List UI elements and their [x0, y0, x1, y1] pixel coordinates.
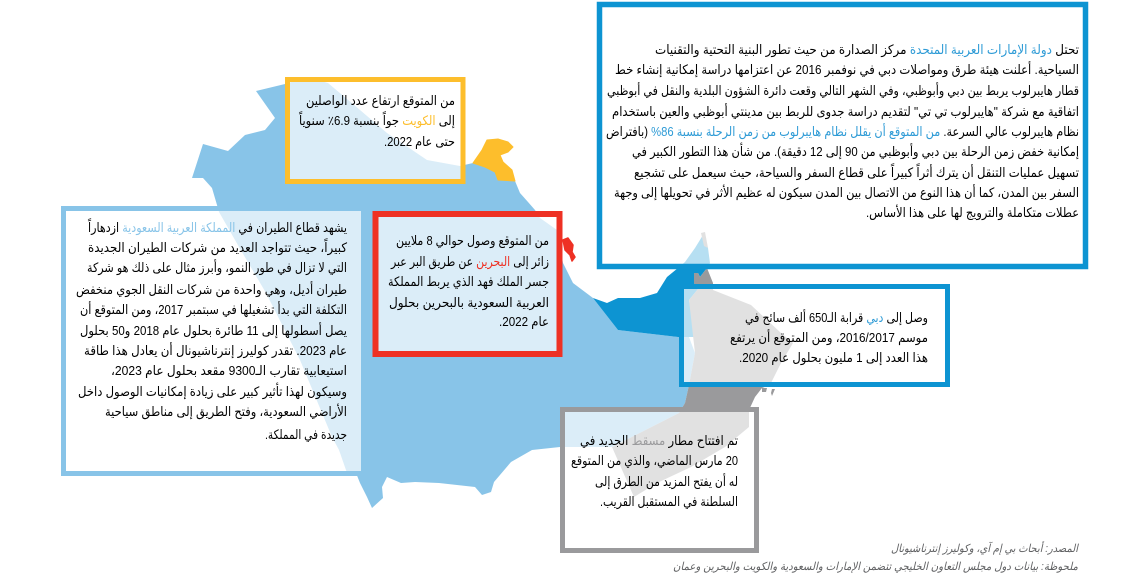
text block: استيعابية تقارب الـ9300 مقعد بحلول عام 2023، [111, 363, 347, 379]
panel: Oman [562, 410, 756, 550]
text block: زائر إلى البحرين عن طريق البر عبر [390, 254, 549, 270]
panel: United Arab Emirates [600, 4, 1086, 266]
map: Oman Musandam tip [701, 232, 708, 248]
text block: يشهد قطاع الطيران في المملكة العربية السعودية ازدهاراً [88, 218, 347, 236]
panel frame [288, 80, 463, 182]
map: United Arab Emirates [593, 235, 710, 337]
map: Oman [612, 268, 793, 497]
source line: المصدر: أبحاث بي إم آي، وكوليرز إنترناشيونال [891, 541, 1080, 555]
text block: يصل أسطولها إلى 11 طائرة بحلول عام 2018 و50 بحلول [80, 322, 347, 339]
text block: العربية السعودية بالبحرين بحلول [389, 295, 549, 311]
text block: وسيكون لهذا تأثير كبير على زيادة إمكانيات الوصول داخل [78, 382, 347, 400]
text block: كبيراً، حيث تتواجد العديد من شركات الطيران الجديدة [88, 238, 348, 256]
text block: السياحية. أعلنت هيئة طرق ومواصلات دبي في نوفمبر 2016 عن اعتزامها دراسة إمكانية إنشاء خط [615, 61, 1079, 78]
source and note [673, 541, 1080, 573]
text block: عام 2022. [499, 314, 549, 329]
panel: Dubai [682, 286, 948, 384]
text block: موسم 2016/2017، ومن المتوقع أن يرتفع [730, 329, 928, 346]
panel frame [376, 214, 560, 354]
text block: طيران أديل، وهي واحدة من شركات النقل الجوي منخفض [76, 281, 347, 298]
text block: له أن يفتح المزيد من الطرق إلى [595, 473, 738, 490]
text block: عام 2023. تقدر كوليرز إنترناشيونال أن يعادل هذا طاقة [84, 342, 347, 359]
text block: حتى عام 2022. [384, 134, 455, 149]
text block: تسهيل عمليات التنقل أن يترك أثراً كبيراً على قطاع السفر والسياحة، حيث سيعمل على تشجيع [634, 163, 1079, 181]
panel frame [562, 410, 756, 550]
text block: اتفاقية مع شركة "هايبرلوب تي تي" لتقديم دراسة جدوى للربط بين مدينتي أبوظبي والعين باستخدام [612, 103, 1079, 120]
text block: من المتوقع وصول حوالي 8 ملايين [396, 233, 549, 249]
map: Bahrain [563, 238, 575, 261]
text block [299, 93, 455, 149]
text block: هذا العدد إلى 1 مليون بحلول عام 2020. [739, 350, 928, 366]
text block: إلى الكويت جواً بنسبة 6.9٪ سنوياً [299, 111, 455, 129]
map: Oman islands [762, 388, 775, 396]
note line: ملحوظة: بيانات دول مجلس التعاون الخليجي تتضمن الإمارات والسعودية والكويت والبحرين وعمان [673, 561, 1078, 573]
panel frame [600, 4, 1086, 266]
map of Gulf countries [192, 77, 793, 508]
text block: السلطنة في المستقبل القريب. [600, 494, 738, 510]
text block [606, 42, 1079, 221]
panel frame [64, 208, 364, 474]
panel: Saudi Arabia [64, 208, 364, 474]
panel: Bahrain [376, 214, 560, 354]
text block: جديدة في المملكة. [265, 427, 347, 442]
text block [76, 218, 348, 442]
text block: عطلات متكاملة والترويج لها على هذا الأساس. [866, 204, 1079, 221]
text block: التي لا تزال في طور النمو، وأبرز مثال على ذلك هو شركة [87, 259, 347, 276]
text block: تحتل دولة الإمارات العربية المتحدة مركز الصدارة من حيث تطور البنية التحتية والتقنيات [655, 42, 1079, 58]
text block: نظام هايبرلوب عالي السرعة. من المتوقع أن يقلل نظام هايبرلوب من زمن الرحلة بنسبة 86% (بافتراض [606, 123, 1079, 140]
panel: Kuwait [288, 80, 463, 182]
text block: الأراضي السعودية، وفتح الطريق إلى مناطق سياحية [105, 403, 347, 420]
text block [730, 309, 928, 366]
text block: وصل إلى دبي قرابة الـ650 ألف سائح في [745, 309, 928, 326]
text block: التكلفة التي بدأ تشغيلها في سبتمبر 2017، ومن المتوقع أن [80, 301, 347, 318]
map: Saudi Arabia [192, 77, 695, 508]
text block: تم افتتاح مطار مسقط الجديد في [580, 433, 738, 449]
text block: إمكانية خفض زمن الرحلة بين دبي وأبوظبي من 90 إلى 12 دقيقة). من شأن هذا التطور الكبير في [632, 142, 1079, 160]
panel frame [682, 286, 948, 384]
text block [388, 233, 549, 329]
text block: 20 مارس الماضي، والذي من المتوقع [571, 453, 738, 469]
text block: من المتوقع ارتفاع عدد الواصلين [306, 93, 455, 109]
text block: جسر الملك فهد الذي يربط المملكة [388, 274, 549, 290]
map: Kuwait [473, 139, 515, 181]
text block [571, 433, 738, 510]
text block: السفر بين المدن، كما أن هذا النوع من الاتصال بين المدن سيكون له عظيم الأثر في تحويلها إلى وجهة [614, 184, 1079, 201]
